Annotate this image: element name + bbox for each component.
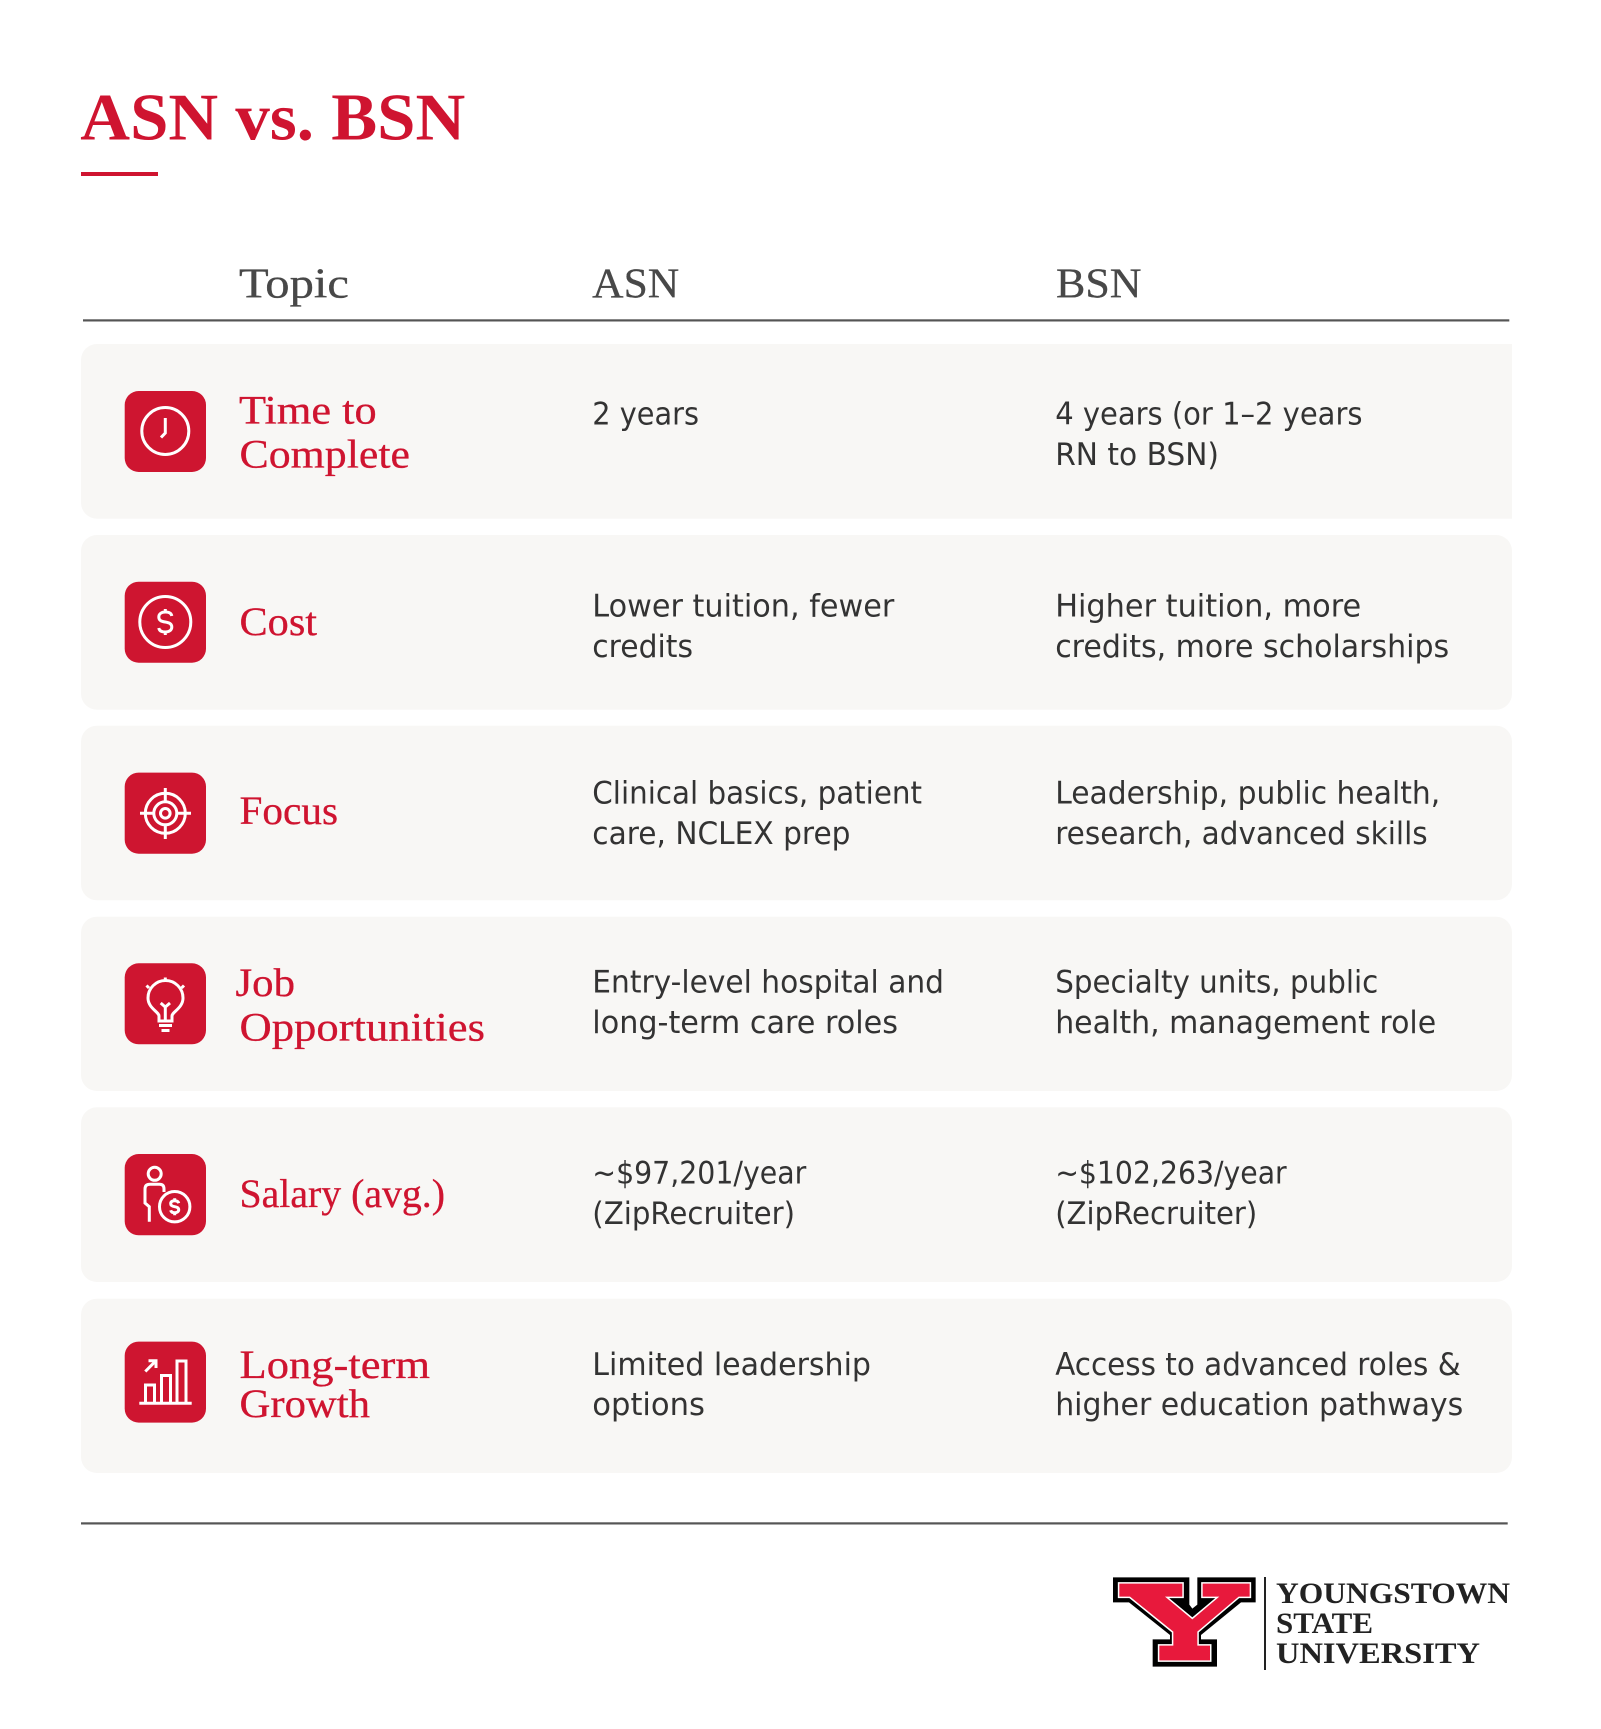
- wordmark: YOUNGSTOWN: [1276, 1577, 1510, 1610]
- row background: [81, 726, 1512, 900]
- BSN value: (ZipRecruiter): [1055, 1196, 1257, 1232]
- row background: [81, 1107, 1512, 1282]
- icon: light bulb: [125, 963, 206, 1044]
- ASN value: (ZipRecruiter): [592, 1196, 795, 1232]
- row background: [81, 535, 1512, 710]
- topic label: Focus: [240, 788, 338, 833]
- wordmark: UNIVERSITY: [1276, 1637, 1480, 1670]
- title: ASN vs. BSN: [80, 80, 465, 154]
- table header: [83, 262, 1509, 322]
- icon: person with coin: [125, 1154, 206, 1235]
- ASN value: options: [592, 1387, 705, 1423]
- row background: [81, 1299, 1512, 1473]
- ASN value: ~$97,201/year: [592, 1155, 807, 1191]
- ASN value: [592, 1155, 807, 1232]
- wordmark: STATE: [1276, 1607, 1373, 1640]
- BSN value: [1055, 396, 1362, 473]
- BSN value: Specialty units, public: [1055, 964, 1378, 1000]
- icon: dollar coin: [125, 582, 206, 663]
- row: Time to Complete: [81, 344, 1512, 519]
- icon: growth chart: [125, 1342, 206, 1423]
- ASN value: Clinical basics, patient: [592, 775, 922, 811]
- ASN value: care, NCLEX prep: [592, 816, 850, 852]
- ASN value: Limited leadership: [592, 1347, 871, 1383]
- topic label: [236, 960, 485, 1049]
- logo divider: [1264, 1577, 1266, 1670]
- topic label: Complete: [240, 431, 410, 476]
- topic label: Opportunities: [240, 1004, 485, 1049]
- ASN value: Lower tuition, fewer: [592, 588, 895, 624]
- topic label: Salary (avg.): [240, 1171, 445, 1216]
- row: Long-term Growth: [81, 1299, 1512, 1473]
- topic label: [240, 1342, 430, 1426]
- topic label: Growth: [240, 1381, 370, 1426]
- BSN value: [1055, 775, 1440, 852]
- BSN value: [1055, 1155, 1287, 1232]
- ASN value: [592, 588, 895, 665]
- BSN value: Higher tuition, more: [1055, 588, 1361, 624]
- ASN value: Entry-level hospital and: [592, 964, 944, 1000]
- row: Job Opportunities: [81, 917, 1512, 1091]
- topic label: [239, 387, 410, 476]
- row background: [81, 917, 1512, 1091]
- topic label: Job: [236, 960, 295, 1005]
- row: Salary: [81, 1107, 1512, 1282]
- BSN value: RN to BSN): [1055, 437, 1219, 473]
- header: ASN: ASN: [592, 262, 679, 308]
- title underline: [81, 172, 158, 176]
- ASN value: [592, 775, 922, 852]
- header rule: [83, 319, 1509, 322]
- BSN value: research, advanced skills: [1055, 816, 1428, 852]
- ASN value: [592, 1347, 871, 1423]
- BSN value: credits, more scholarships: [1055, 629, 1449, 665]
- BSN value: ~$102,263/year: [1055, 1155, 1287, 1191]
- BSN value: [1055, 588, 1449, 665]
- topic label: Time to: [239, 387, 377, 432]
- topic label: Long-term: [240, 1342, 430, 1387]
- BSN value: Access to advanced roles &: [1055, 1347, 1461, 1383]
- BSN value: [1055, 1347, 1463, 1423]
- header: BSN: BSN: [1056, 262, 1142, 308]
- ASN value: 2 years: [592, 396, 699, 432]
- row: Cost: [81, 535, 1512, 710]
- footer rule: [81, 1522, 1508, 1524]
- wordmark: [1276, 1577, 1510, 1670]
- BSN value: health, management role: [1055, 1005, 1436, 1041]
- icon: target: [125, 773, 206, 854]
- row: Focus: [81, 726, 1512, 900]
- ASN value: long-term care roles: [592, 1005, 898, 1041]
- logo: Youngstown State University: [1113, 1577, 1510, 1670]
- row background: [81, 344, 1512, 519]
- header: Topic: Topic: [239, 262, 349, 308]
- ASN value: credits: [592, 629, 693, 665]
- icon: clock: [125, 391, 206, 472]
- BSN value: higher education pathways: [1055, 1387, 1463, 1423]
- icon: block Y: [1113, 1577, 1256, 1667]
- topic label: Cost: [240, 599, 317, 644]
- ASN value: [592, 964, 944, 1041]
- BSN value: Leadership, public health,: [1055, 775, 1440, 811]
- BSN value: [1055, 964, 1436, 1041]
- BSN value: 4 years (or 1–2 years: [1055, 396, 1362, 432]
